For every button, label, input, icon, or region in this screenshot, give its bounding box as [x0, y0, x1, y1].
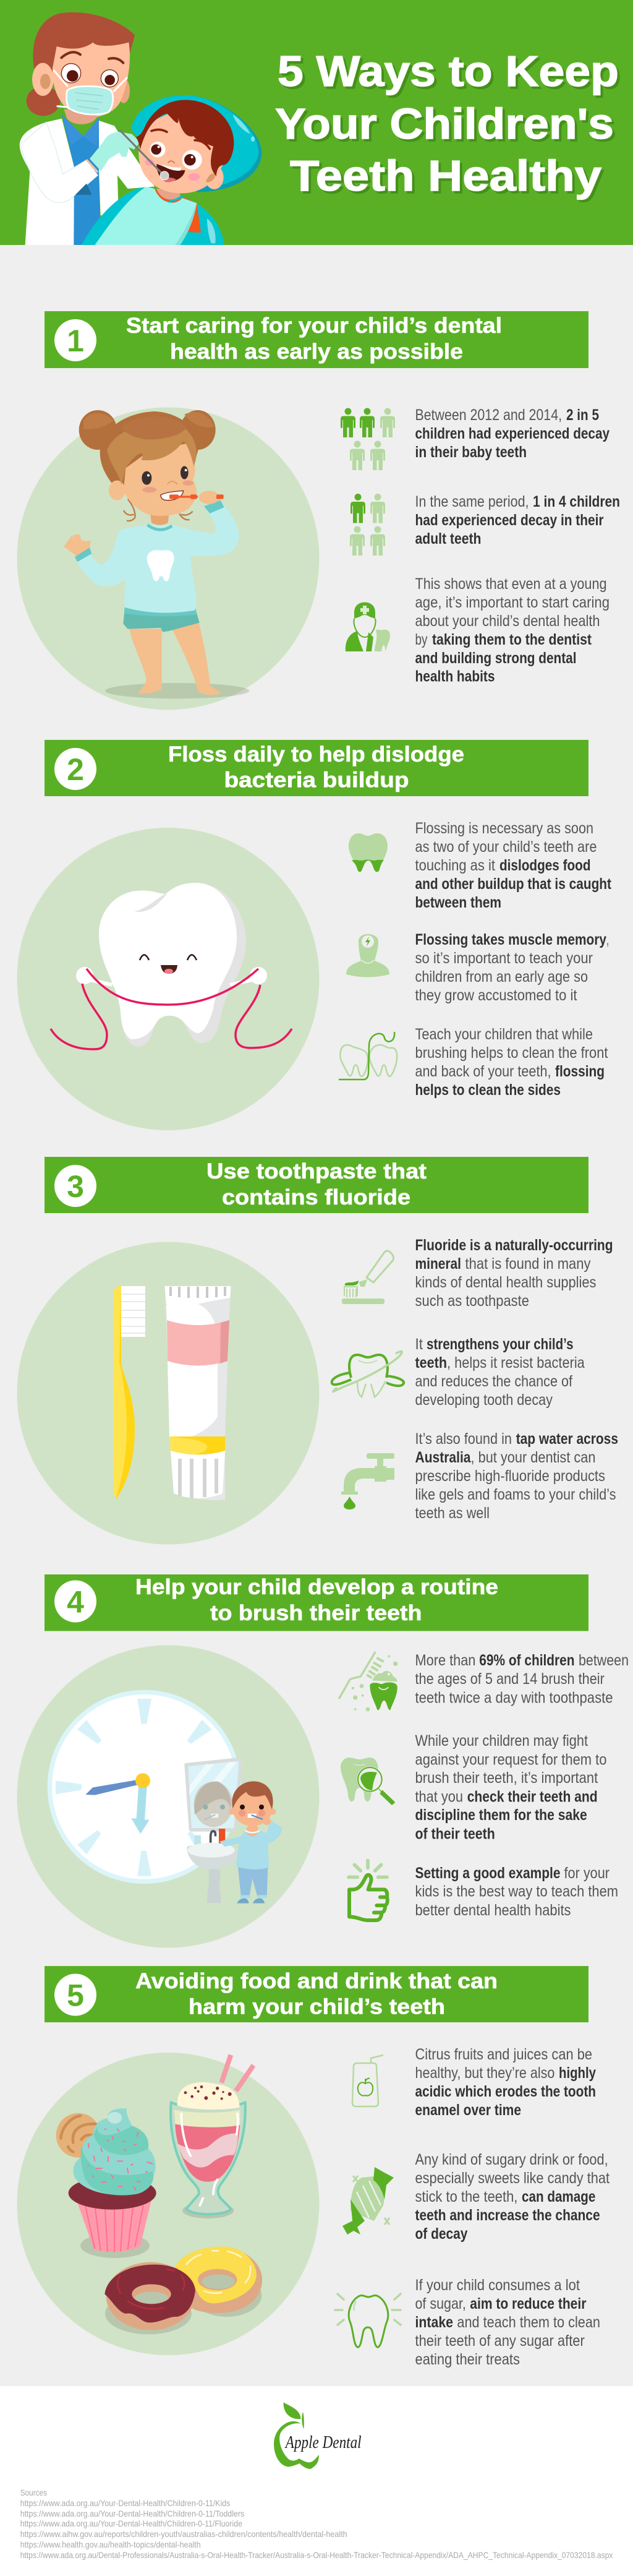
illustration: smiling tooth with floss — [17, 828, 319, 1130]
text: they grow accustomed to it — [415, 987, 577, 1004]
icon: toothpaste on brush — [342, 1251, 394, 1304]
text: teeth as well — [415, 1505, 490, 1522]
text: If your child consumes a lot — [415, 2277, 580, 2294]
sources: https://www.health.gov.au/health-topics/dental-health — [20, 2540, 201, 2549]
heading banner 1: Start caring for your child’s dental — [126, 314, 502, 338]
text: acidic which erodes the tooth — [415, 2083, 596, 2100]
icon: tooth with orbit arrows — [332, 1351, 404, 1397]
text: Any kind of sugary drink or food, — [415, 2151, 608, 2168]
boy at sink with mirror — [184, 1758, 282, 1904]
text: adult teeth — [415, 530, 481, 547]
text: , helps it resist bacteria — [447, 1354, 585, 1372]
text — [415, 2277, 600, 2368]
heading banner 2: Floss daily to help dislodge — [168, 742, 464, 766]
text: teeth and increase the chance — [415, 2207, 600, 2224]
logo: Apple Dental — [274, 2402, 362, 2469]
header band — [0, 0, 633, 245]
heading banner 5: harm your child’s teeth — [189, 1994, 445, 2019]
text: between them — [415, 894, 501, 911]
text: Between 2012 and 2014, — [415, 406, 562, 424]
fact: reduce sugar — [335, 2277, 600, 2368]
title: Your Children's — [278, 102, 616, 150]
icon: dentist and tooth — [346, 603, 390, 651]
text: , — [606, 931, 609, 948]
text — [415, 931, 609, 1004]
heading banner 3: 3 — [67, 1169, 84, 1204]
text: the ages of 5 and 14 brush their — [415, 1670, 605, 1688]
sources — [20, 2488, 613, 2560]
text: Australia — [415, 1449, 471, 1466]
heading banner 3: contains fluoride — [222, 1185, 410, 1209]
icon: head with brain — [346, 934, 389, 977]
text — [415, 1237, 613, 1310]
title: 5 Ways to Keep — [280, 49, 621, 98]
section 4 — [17, 1574, 629, 1947]
icon: tooth with buildup — [349, 833, 388, 872]
text — [415, 1732, 607, 1842]
text: healthy, but they’re also — [415, 2064, 554, 2082]
text: highly — [559, 2064, 596, 2082]
heading banner 3: Use toothpaste that — [206, 1159, 427, 1183]
text: mineral — [415, 1255, 461, 1273]
text — [415, 820, 612, 911]
icon: wrapped candy — [342, 2167, 394, 2235]
heading banner 3 — [45, 1157, 588, 1213]
text: It — [415, 1336, 423, 1353]
fact: sugary foods — [342, 2151, 610, 2243]
text: such as toothpaste — [415, 1292, 529, 1310]
illustration: cupcake, milkshake and doughnuts — [17, 2053, 319, 2355]
text — [415, 1652, 629, 1706]
text: helps to clean the sides — [415, 1081, 561, 1099]
heading banner 2: bacteria buildup — [224, 768, 409, 792]
text: children from an early age so — [415, 968, 588, 985]
text: of their teeth — [415, 1825, 495, 1842]
text: in their baby teeth — [415, 444, 527, 461]
text: and back of your teeth, — [415, 1063, 551, 1080]
text — [415, 1865, 618, 1919]
heading banner 4 — [45, 1574, 588, 1631]
text: teeth — [415, 1354, 447, 1372]
text: In the same period, — [415, 493, 529, 510]
clock — [48, 1690, 241, 1884]
text: for your — [564, 1865, 610, 1882]
text: stick to the teeth, — [415, 2188, 517, 2205]
logo: Apple Dental: Apple Dental — [284, 2432, 362, 2452]
section 5 — [17, 1966, 610, 2368]
text: brush their teeth, it’s important — [415, 1769, 598, 1787]
text: that is found in many — [465, 1255, 591, 1273]
text: of decay — [415, 2225, 467, 2243]
heading banner 1 — [45, 311, 588, 368]
text — [415, 575, 610, 685]
text: their teeth of any sugar after — [415, 2332, 585, 2350]
text: intake — [415, 2314, 453, 2331]
heading banner 2 — [45, 740, 588, 796]
heading banner 4: to brush their teeth — [210, 1601, 422, 1625]
text: against your request for them to — [415, 1751, 607, 1768]
sources: https://www.ada.org.au/Your-Dental-Health/Children-0-11/Toddlers — [20, 2509, 244, 2518]
heading banner 1: health as early as possible — [170, 340, 463, 364]
cupcake — [56, 2108, 156, 2258]
text — [415, 1430, 618, 1522]
text: and teach them to clean — [457, 2314, 600, 2331]
footer — [0, 2386, 633, 2576]
text: and reduces the chance of — [415, 1373, 572, 1390]
text: teeth twice a day with toothpaste — [415, 1689, 613, 1706]
text: health habits — [415, 668, 495, 685]
text — [415, 1026, 608, 1099]
toothbrush — [113, 1286, 145, 1500]
text: can damage — [522, 2188, 595, 2205]
text: Citrus fruits and juices can be — [415, 2046, 592, 2063]
section 3 — [17, 1157, 618, 1544]
icon: tooth with rays — [335, 2294, 401, 2347]
illustration: clock and boy brushing teeth at sink — [17, 1646, 319, 1947]
text — [415, 1336, 585, 1409]
heading banner 4: 4 — [67, 1585, 84, 1620]
text: , but your dentist can — [471, 1449, 596, 1466]
text: Setting a good example — [415, 1865, 561, 1882]
text — [415, 2151, 610, 2243]
milkshake — [171, 2055, 253, 2218]
text: strengthens your child’s — [427, 1336, 574, 1353]
text: This shows that even at a young — [415, 575, 607, 593]
doughnuts — [104, 2246, 262, 2334]
fact: muscle memory — [346, 931, 609, 1004]
fact: citrus acid — [352, 2046, 596, 2119]
title: Your Children's — [275, 100, 614, 148]
section 1 — [17, 311, 620, 710]
text: by — [415, 631, 428, 648]
heading banner 5: Avoiding food and drink that can — [135, 1969, 498, 1993]
sources: https://www.aihw.gov.au/reports/children-youth/australias-children/contents/health/dental-health — [20, 2529, 347, 2539]
fact: fluoride mineral — [342, 1237, 613, 1310]
icon: tooth under magnifying glass — [341, 1758, 395, 1805]
text: Flossing is necessary as soon — [415, 820, 593, 837]
title: 5 Ways to Keep — [278, 47, 619, 95]
icon: four people, one highlighted — [350, 494, 385, 556]
text: 2 in 5 — [566, 406, 599, 424]
text: Teach your children that while — [415, 1026, 593, 1043]
text: taking them to the dentist — [432, 631, 592, 648]
text: eating their treats — [415, 2351, 520, 2368]
heading banner 1: 1 — [67, 324, 84, 358]
section 2 — [17, 740, 612, 1130]
heading banner 2: 2 — [67, 752, 84, 787]
fact: dislodges food — [349, 820, 612, 911]
title: Teeth Healthy — [290, 152, 601, 200]
text — [415, 2046, 596, 2119]
text: aim to reduce their — [470, 2295, 587, 2312]
fact: set a good example — [349, 1860, 618, 1920]
text: about your child’s dental health — [415, 612, 600, 630]
illustration: girl brushing teeth — [17, 407, 319, 710]
text: kinds of dental health supplies — [415, 1274, 596, 1291]
icon: five people, two highlighted — [341, 408, 395, 470]
fact: flossing cleans sides — [339, 1026, 608, 1099]
text: While your children may fight — [415, 1732, 588, 1750]
text: 69% of children — [479, 1652, 575, 1669]
toothpaste tube — [164, 1286, 231, 1500]
fact: tap water — [341, 1430, 618, 1522]
text: age, it’s important to start caring — [415, 594, 610, 611]
heading banner 5: 5 — [67, 1978, 84, 2013]
text: developing tooth decay — [415, 1391, 553, 1409]
illustration: dentist examining child — [20, 12, 261, 245]
heading banner 4: Help your child develop a routine — [135, 1575, 498, 1599]
text: as two of your child’s teeth are — [415, 838, 597, 856]
sources: https://www.ada.org.au/Your-Dental-Health/Children-0-11/Kids — [20, 2498, 230, 2508]
icon: thumbs up — [349, 1860, 388, 1920]
sources: Sources — [20, 2488, 47, 2497]
text: check their teeth and — [467, 1788, 598, 1805]
text: of sugar, — [415, 2295, 466, 2312]
fact: 1 in 4 — [350, 493, 620, 556]
text: dislodges food — [499, 857, 591, 874]
icon: brush, bubbles and tooth — [339, 1652, 397, 1711]
text: that you — [415, 1788, 463, 1805]
icon: two teeth with floss — [339, 1032, 397, 1080]
text: More than — [415, 1652, 475, 1669]
heading banner 5 — [45, 1966, 588, 2022]
text: and building strong dental — [415, 650, 576, 667]
title — [275, 47, 621, 202]
text: brushing helps to clean the front — [415, 1044, 608, 1062]
text: prescribe high-fluoride products — [415, 1467, 605, 1485]
text: discipline them for the sake — [415, 1806, 587, 1824]
fact: see the dentist — [346, 575, 610, 685]
text — [415, 493, 620, 547]
icon: juice box with apple — [352, 2055, 383, 2106]
text: It’s also found in — [415, 1430, 512, 1448]
fact: strengthens teeth — [332, 1336, 585, 1409]
text: enamel over time — [415, 2102, 521, 2119]
sources: https://www.ada.org.au/Your-Dental-Health/Children-0-11/Fluoride — [20, 2518, 242, 2528]
text — [415, 406, 610, 461]
fact: 2 in 5 — [341, 406, 610, 470]
text: better dental health habits — [415, 1902, 571, 1919]
text: so it’s important to teach your — [415, 950, 593, 967]
illustration: toothbrush and toothpaste tube — [17, 1242, 319, 1544]
text: especially sweets like candy that — [415, 2170, 610, 2187]
text: touching as it — [415, 857, 495, 874]
title: Teeth Healthy — [292, 154, 604, 202]
fact: 69% of children — [339, 1652, 629, 1711]
text: flossing — [555, 1063, 605, 1080]
icon: dripping tap — [341, 1453, 394, 1509]
fact: check their teeth — [341, 1732, 607, 1842]
